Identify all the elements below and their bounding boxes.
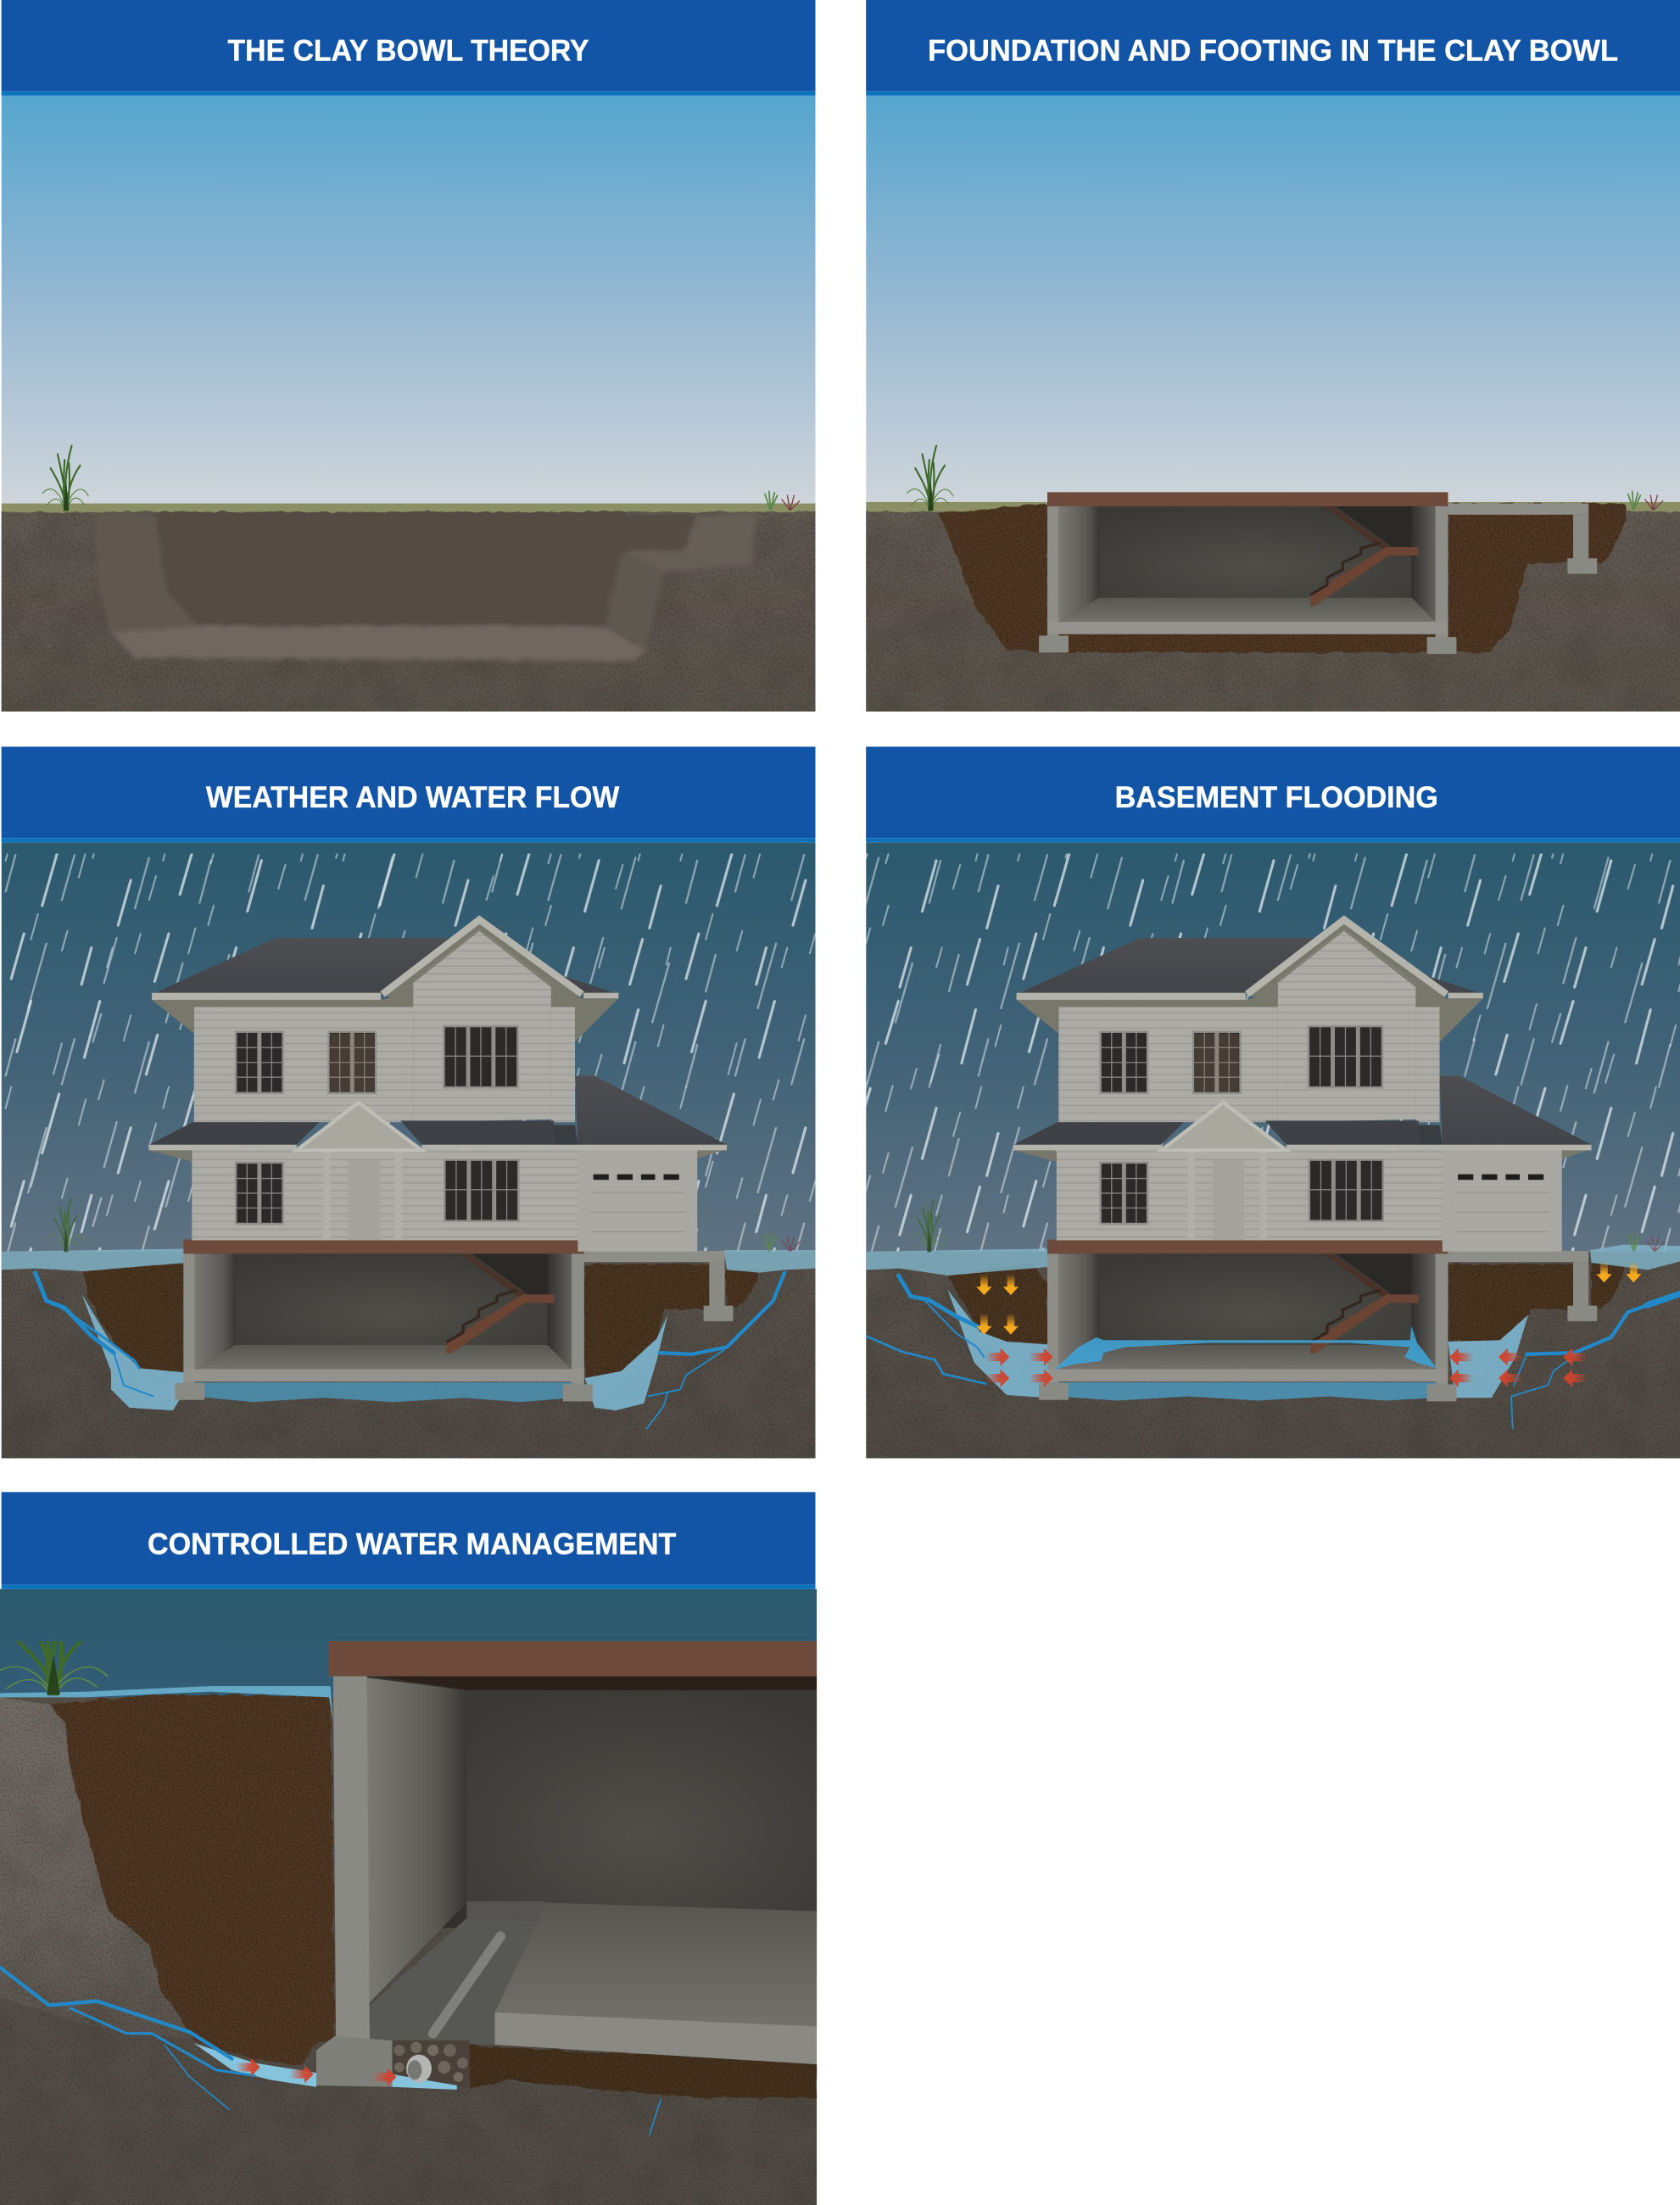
- basement interior: [367, 1675, 817, 2064]
- drain pipe: [406, 2055, 432, 2083]
- water channels and seepage: [0, 1968, 661, 2135]
- header: controlled water management: CONTROLLED WATER MANAGEMENT: [148, 1527, 676, 1560]
- storm sky: [866, 842, 1680, 1253]
- storm sky: [2, 842, 815, 1253]
- backfill soil: [84, 1264, 761, 1378]
- panel: the clay bowl theory: [0, 96, 844, 751]
- icon: grass: [907, 446, 953, 511]
- ground: [866, 511, 1680, 712]
- surface water: [0, 1686, 333, 1722]
- header: basement flooding: BASEMENT FLOODING: [1115, 781, 1438, 814]
- house: [1013, 919, 1592, 1252]
- drain stone bed: [393, 2040, 470, 2087]
- rain: [2, 854, 815, 1252]
- rain: [866, 854, 1680, 1252]
- horizon grass strip: [866, 502, 1680, 513]
- underground water channels: [35, 1273, 784, 1429]
- header: foundation and footing: FOUNDATION AND FOOTING IN THE CLAY BOWL: [928, 34, 1618, 67]
- basement flood water: [1054, 1326, 1437, 1370]
- sky: [2, 96, 815, 505]
- panel: controlled water management: [0, 1589, 817, 2205]
- sill plate: [329, 1641, 817, 1690]
- header: the clay bowl theory: THE CLAY BOWL THEORY: [228, 34, 589, 67]
- backfill soil: [49, 1694, 335, 2066]
- header: controlled water management: [2, 1492, 815, 1589]
- icon: small plants: [1628, 1232, 1665, 1252]
- icon: small plants: [763, 1232, 800, 1252]
- ground: [0, 1697, 817, 2205]
- foundation wall: [333, 1677, 370, 2046]
- pressure arrows: red: [985, 1348, 1588, 1387]
- foundation: [175, 1240, 734, 1401]
- header: the clay bowl theory: [2, 0, 815, 96]
- icon: grass: [0, 1610, 108, 1694]
- underground water channels: [866, 1276, 1680, 1429]
- foundation: [1039, 492, 1597, 654]
- backfill soil: [947, 1263, 1625, 1344]
- seepage arrows: yellow down: [976, 1261, 1641, 1335]
- surface water: [2, 1248, 815, 1273]
- pressure arrows: red: [237, 2058, 396, 2086]
- surface water: [866, 1244, 1680, 1276]
- water pooled against foundation: [81, 1294, 667, 1410]
- horizon grass strip: [2, 504, 815, 515]
- footing: [316, 2036, 393, 2087]
- icon: grass: [47, 1200, 84, 1252]
- soil under slab: [470, 2046, 817, 2098]
- panel: basement flooding: [866, 842, 1680, 1459]
- water pooled against foundation: [947, 1290, 1528, 1401]
- icon: grass: [42, 446, 88, 511]
- excavated clay bowl: [94, 512, 756, 661]
- ground: [2, 1252, 815, 1459]
- header: basement flooding: [866, 746, 1680, 842]
- panel: foundation and footing: [838, 96, 1680, 751]
- header: weather and water flow: WEATHER AND WATER FLOW: [206, 781, 619, 814]
- header: weather and water flow: [2, 746, 815, 842]
- foundation: [1039, 1240, 1597, 1401]
- house: [149, 919, 727, 1252]
- storm sky: [0, 1589, 817, 1716]
- ground: [2, 511, 816, 712]
- ground: [866, 1252, 1680, 1459]
- icon: grass: [910, 1200, 947, 1252]
- backfill soil: [939, 504, 1627, 652]
- sky: [866, 96, 1680, 505]
- header: foundation and footing: [866, 0, 1680, 96]
- icon: small plants: [1628, 491, 1663, 511]
- panel: weather and water flow: [2, 842, 815, 1459]
- icon: small plants: [765, 491, 800, 511]
